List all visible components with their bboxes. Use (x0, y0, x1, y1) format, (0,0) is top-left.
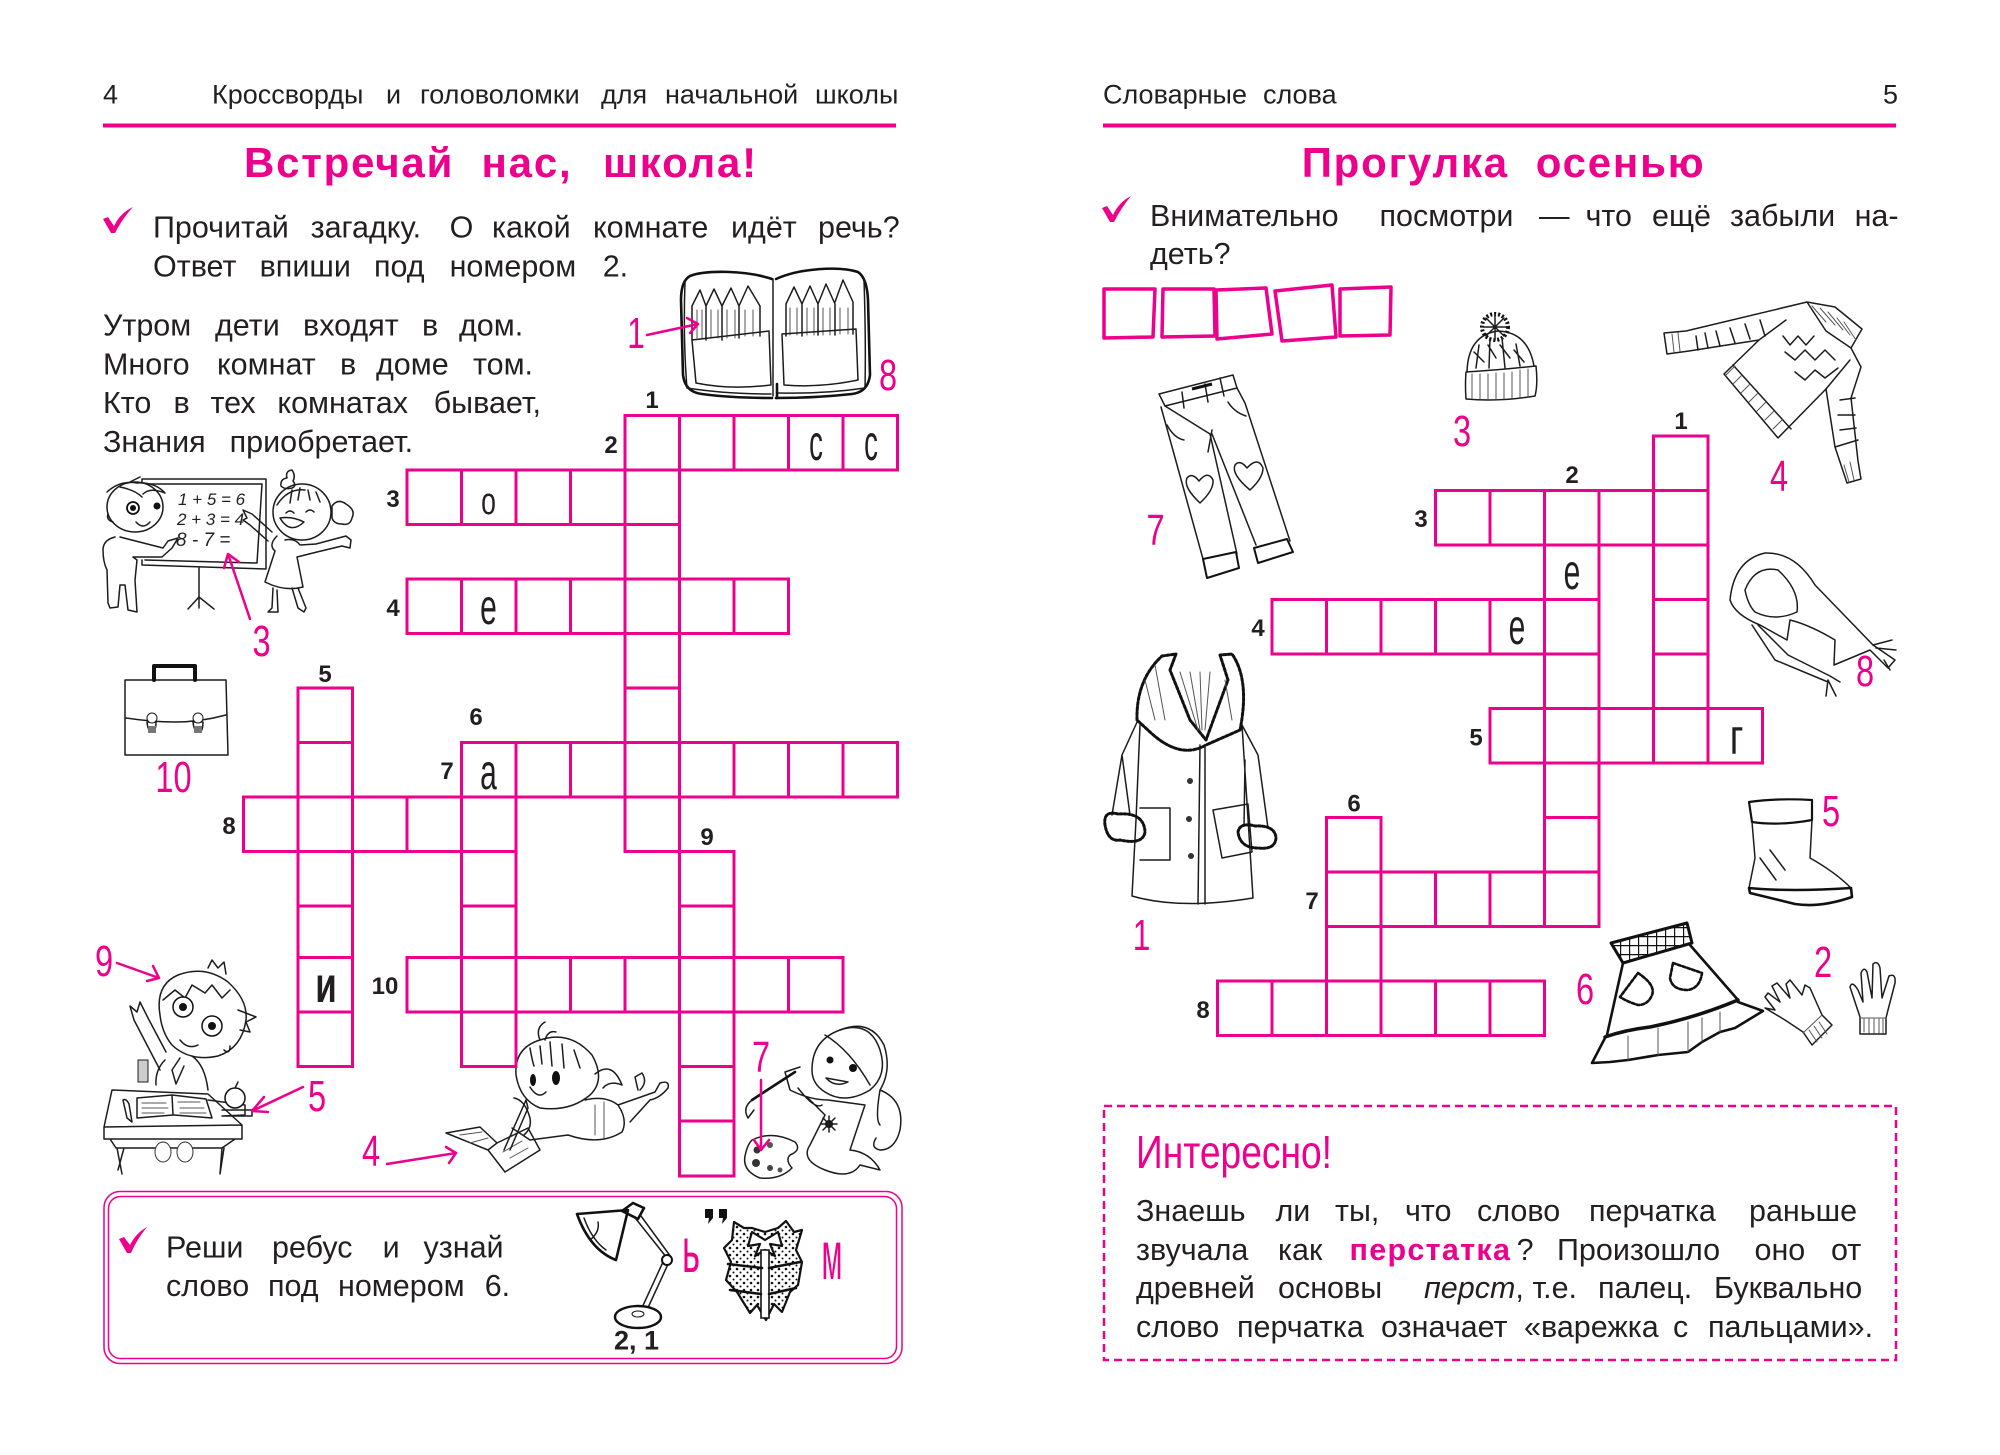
riddle poem: тех (210, 386, 256, 420)
riddle poem: бывает, (434, 386, 541, 420)
handwritten pink clue numbers: right page: 8 (1856, 647, 1874, 696)
panel body text (1136, 1194, 1873, 1344)
handwritten pink clue numbers: right page: 3 (1453, 407, 1471, 456)
task text: riddle instruction (153, 210, 900, 283)
riddle poem: Много (103, 348, 190, 382)
panel: rebus task (104, 1192, 902, 1364)
handwritten pink clue numbers with arrows: left page: 10 (155, 753, 192, 802)
task text: riddle instruction: впиши (260, 249, 351, 283)
panel body text: пальцами». (1708, 1310, 1873, 1344)
icon: ruffled blouse (724, 1221, 802, 1320)
riddle poem: в (422, 309, 438, 343)
illustration: pencil case (681, 269, 870, 398)
crossword given letters: left page: с (864, 414, 878, 471)
right page title: осенью (1536, 139, 1705, 186)
boy (107, 482, 163, 532)
task text: what else to wear: деть? (1150, 237, 1231, 271)
crossword given letters: right page: е (1564, 544, 1580, 600)
handwritten pink clue numbers with arrows: left page: 7 (752, 1033, 770, 1082)
left page header: начальной (665, 80, 798, 110)
handwritten pink clue numbers with arrows: left page (95, 309, 897, 1176)
handwritten pink clue numbers: right page: 7 (1147, 506, 1165, 555)
panel body text: означает (1381, 1310, 1508, 1344)
handwritten pink clue numbers with arrows: left page: 3 (252, 617, 271, 666)
panel body text: Буквально (1714, 1271, 1862, 1305)
illustration: gloves (1765, 963, 1895, 1045)
panel body text: древней (1136, 1271, 1255, 1305)
panel body text: как (1278, 1233, 1323, 1267)
rebus comma marks (705, 1209, 727, 1224)
panel body text: перстатка (1350, 1233, 1511, 1267)
task text: riddle instruction: Прочитай (153, 210, 289, 244)
panel: interesting fact (1104, 1106, 1896, 1360)
panel body text: с (1673, 1310, 1688, 1344)
riddle poem: дом. (459, 309, 523, 343)
task text: riddle instruction: загадку. (311, 210, 421, 244)
crossword given letters: left page: о (481, 479, 496, 522)
riddle poem: комнатах (277, 386, 408, 420)
rebus task text: узнай (424, 1231, 504, 1265)
crossword numbers: left page: 10 (372, 973, 398, 1000)
illustration: pompom hat (1466, 314, 1537, 400)
riddle poem: приобретает. (230, 425, 413, 459)
crossword numbers: right page: 1 (1674, 408, 1688, 435)
panel body text: перчатка (1589, 1194, 1716, 1228)
icon: check mark, rebus task (119, 1227, 147, 1253)
left page title: Встречай (244, 139, 454, 186)
left page header: 4 (103, 80, 118, 110)
crossword: left page (222, 387, 898, 1176)
panel body text: Знаешь (1136, 1194, 1246, 1228)
riddle poem: Утром (103, 309, 191, 343)
illustration: jeans with hearts (1159, 375, 1293, 578)
panel body text: слово (1477, 1194, 1560, 1228)
crossword numbers: left page: 5 (318, 661, 332, 688)
left page header: и (386, 80, 401, 110)
panel body text: , (1515, 1271, 1524, 1305)
crossword: right page (1196, 408, 1762, 1036)
task text: riddle instruction: О (450, 210, 473, 244)
hand-drawn answer boxes (1104, 285, 1391, 341)
panel body text: перст (1424, 1271, 1515, 1305)
panel body text: оно (1754, 1233, 1805, 1267)
task text: riddle instruction: речь? (818, 210, 900, 244)
crossword numbers: left page: 4 (386, 595, 400, 622)
illustration: skirt (1592, 923, 1763, 1063)
left page header: головоломки (420, 80, 580, 110)
crossword numbers: left page (222, 387, 714, 1000)
task text: riddle instruction: номером (450, 249, 576, 283)
riddle poem: в (340, 348, 356, 382)
illustration: fur coat (1105, 654, 1276, 904)
icon: desk lamp (577, 1203, 672, 1328)
panel body text: от (1831, 1233, 1861, 1267)
crossword numbers: left page: 1 (645, 387, 659, 414)
illustration: children at the blackboard: 8 - 7 = (176, 530, 230, 551)
task text: what else to wear: — (1539, 199, 1570, 233)
crossword given letters: left page: и (315, 958, 337, 1014)
handwritten pink clue numbers: right page: 5 (1822, 787, 1840, 836)
left page header: Кроссворды (212, 80, 363, 110)
riddle poem: входят (303, 309, 399, 343)
crossword numbers: right page (1196, 408, 1688, 1024)
task text: what else to wear: забыли (1730, 199, 1835, 233)
handwritten pink clue numbers with arrows: left page: 5 (308, 1072, 326, 1121)
rebus task text: и (383, 1231, 400, 1265)
crossword given letters: right page: е (1509, 599, 1525, 655)
task text: riddle instruction: Ответ (153, 249, 237, 283)
illustration: girl painting with palette (745, 1026, 901, 1178)
handwritten pink clue numbers: right page (1133, 407, 1874, 1014)
icon: check mark, left task (103, 207, 133, 233)
illustration: briefcase (125, 666, 228, 755)
illustration: winter boot (1749, 799, 1852, 905)
handwritten pink clue numbers with arrows: left page: 9 (95, 937, 113, 986)
crossword given letters: right page (1509, 544, 1743, 765)
crossword numbers: left page: 7 (440, 758, 454, 785)
rebus number label: 2, 1 (614, 1326, 659, 1356)
crossword given letters: left page: с (809, 414, 823, 471)
illustration: boy at school desk (104, 960, 256, 1174)
crossword numbers: left page: 8 (222, 813, 236, 840)
crossword numbers: right page: 8 (1196, 997, 1210, 1024)
right page header: слова (1263, 80, 1338, 110)
rebus task text (166, 1231, 510, 1303)
rebus task text: ребус (272, 1231, 353, 1265)
task text: riddle instruction: 2. (603, 249, 628, 283)
crossword numbers: right page: 6 (1347, 790, 1361, 818)
girl (273, 484, 331, 540)
left page header (103, 80, 898, 128)
riddle poem: комнат (217, 348, 316, 382)
handwritten pink clue numbers: right page: 4 (1770, 452, 1788, 501)
task text: what else to wear: ещё (1652, 199, 1711, 233)
crossword numbers: right page: 3 (1414, 506, 1428, 533)
crossword numbers: left page: 9 (700, 824, 714, 851)
rebus task text: слово (166, 1269, 249, 1303)
riddle poem: Кто (103, 386, 151, 420)
panel body text: Произошло (1557, 1233, 1720, 1267)
panel body text: слово (1136, 1310, 1219, 1344)
crossword numbers: right page: 4 (1251, 615, 1265, 642)
riddle poem (103, 309, 541, 459)
task text: what else to wear: посмотри (1380, 199, 1513, 233)
handwritten pink clue numbers with arrows: left page: 4 (362, 1127, 380, 1176)
handwritten rebus letters: ь (682, 1215, 700, 1286)
crossword numbers: left page: 3 (386, 486, 400, 513)
crossword numbers: right page: 2 (1565, 462, 1579, 489)
illustration: children at the blackboard (103, 470, 353, 612)
illustration: girl lying with notebook (446, 1022, 668, 1172)
handwritten pink clue numbers: right page: 1 (1133, 911, 1150, 960)
right page header: Словарные (1103, 80, 1247, 110)
illustration: sweater (1664, 302, 1862, 483)
task text: what else to wear (1150, 199, 1899, 271)
riddle poem: доме (376, 348, 449, 382)
handwritten rebus letters (682, 1215, 842, 1295)
panel body text: ли (1276, 1194, 1310, 1228)
crossword numbers: left page: 2 (604, 432, 618, 459)
crossword numbers: right page: 5 (1469, 724, 1483, 752)
handwritten rebus letters: м (822, 1218, 842, 1295)
task text: what else to wear: на- (1855, 199, 1899, 233)
task text: what else to wear: что (1586, 199, 1632, 233)
panel body text: ты, (1335, 1194, 1379, 1228)
riddle poem: том. (473, 348, 533, 382)
task text: riddle instruction: идёт (731, 210, 797, 244)
handwritten pink clue numbers: right page: 2 (1814, 938, 1832, 987)
panel heading: Интересно! (1136, 1126, 1332, 1178)
panel body text: раньше (1749, 1194, 1857, 1228)
crossword given letters: left page: а (480, 744, 497, 800)
right page header: 5 (1883, 80, 1898, 110)
crossword given letters: left page (315, 414, 878, 1014)
right page title: Прогулка (1302, 139, 1509, 186)
rebus task text: Реши (166, 1231, 243, 1265)
task text: riddle instruction: под (374, 249, 425, 283)
rebus task text: под (268, 1269, 319, 1303)
left page header: школы (815, 80, 898, 110)
right page header (1103, 80, 1898, 128)
illustration: children at the blackboard: 2 + 3 = 4 (176, 510, 244, 529)
crossword numbers: right page: 7 (1305, 888, 1319, 915)
riddle poem: Знания (103, 425, 206, 459)
panel body text: что (1405, 1194, 1451, 1228)
riddle poem: дети (215, 309, 280, 343)
rebus task text: 6. (485, 1269, 510, 1303)
handwritten pink clue numbers with arrows: left page: 8 (879, 351, 897, 400)
illustration: scarf (1730, 553, 1896, 696)
panel body text: основы (1278, 1271, 1382, 1305)
panel body text: «варежка (1524, 1310, 1659, 1344)
riddle poem: в (174, 386, 190, 420)
task text: riddle instruction: какой (492, 210, 571, 244)
panel body text: т.е. (1532, 1271, 1577, 1305)
panel body text: перчатка (1237, 1310, 1364, 1344)
crossword given letters: left page: е (480, 579, 497, 635)
crossword given letters: right page: г (1730, 710, 1743, 765)
handwritten pink clue numbers with arrows: left page: 1 (627, 309, 645, 358)
left page title: нас, (482, 139, 572, 186)
panel body text: ? (1517, 1233, 1534, 1267)
handwritten pink clue numbers: right page: 6 (1576, 965, 1594, 1014)
left page header: для (601, 80, 647, 110)
task text: riddle instruction: комнате (593, 210, 708, 244)
illustration: children at the blackboard: 1 + 5 = 6 (178, 490, 246, 509)
task text: what else to wear: Внимательно (1150, 199, 1339, 233)
left page title: школа! (603, 139, 758, 186)
panel body text: палец. (1598, 1271, 1692, 1305)
panel body text: звучала (1136, 1233, 1248, 1267)
icon: check mark, right task (1102, 196, 1131, 222)
rebus task text: номером (338, 1269, 465, 1303)
crossword numbers: left page: 6 (469, 704, 483, 731)
